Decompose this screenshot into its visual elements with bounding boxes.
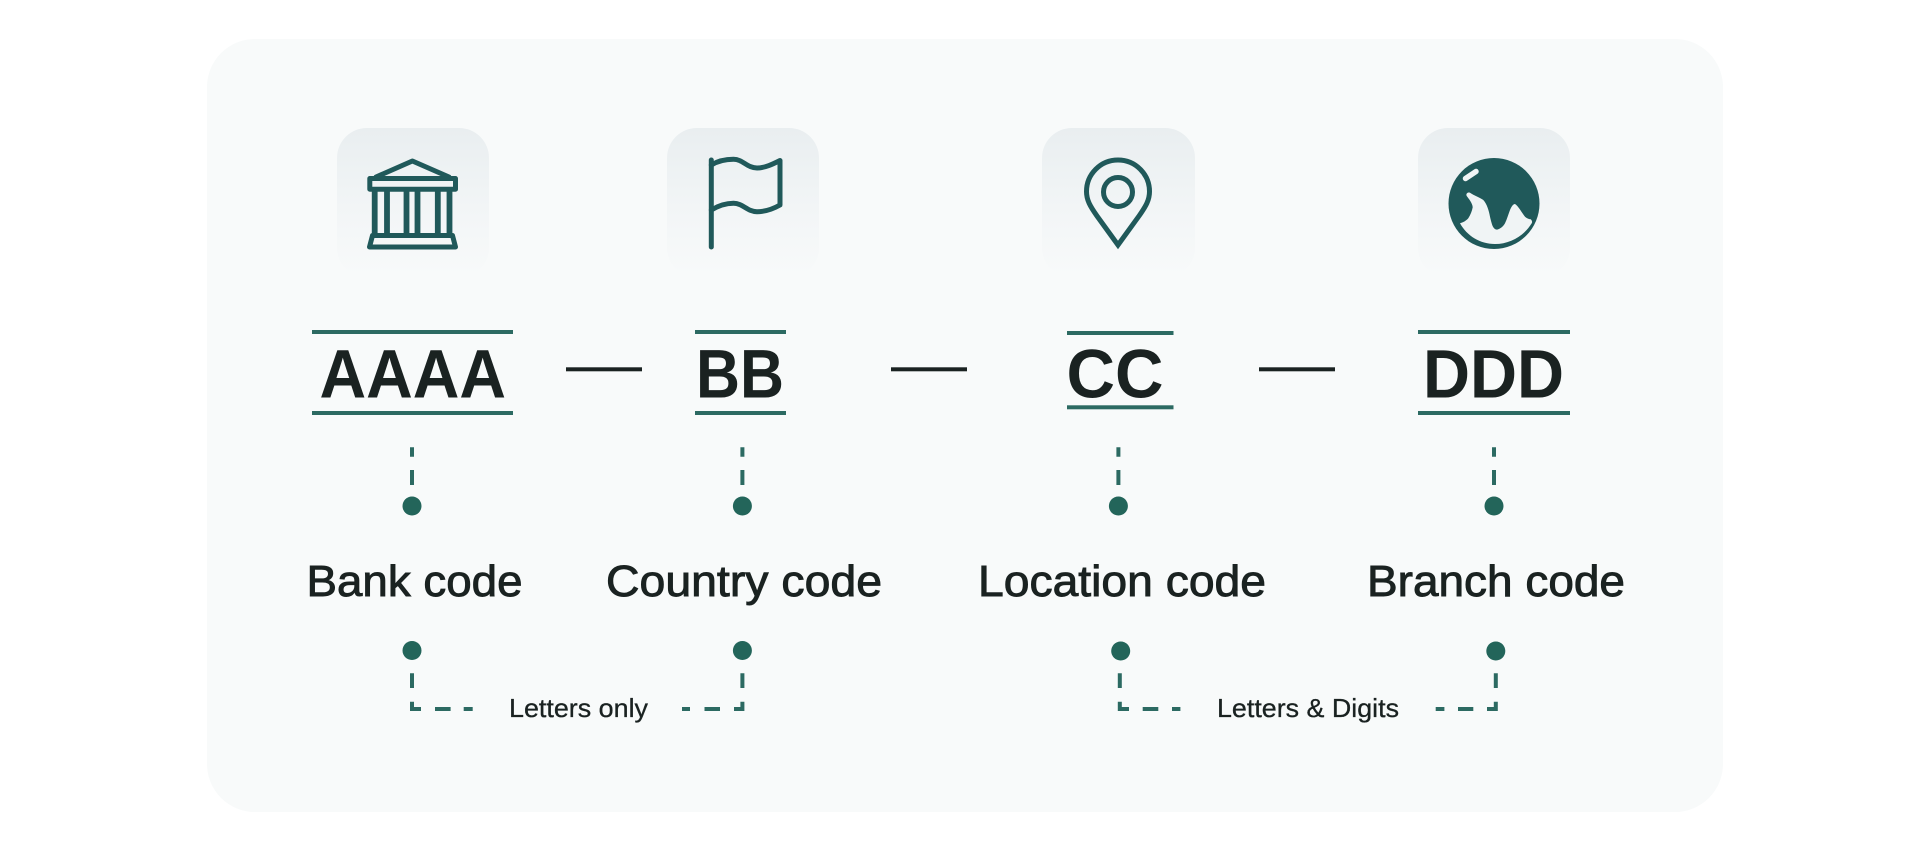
caption: Letters only: Letters only <box>509 693 648 723</box>
icon: location pin <box>1042 128 1195 278</box>
label: Country code: Country code <box>606 557 882 606</box>
label: Branch code: Branch code <box>1367 557 1625 606</box>
connector: CC to Location code <box>1109 447 1128 516</box>
connector: DDD to Branch code <box>1484 447 1504 516</box>
code group: AAAA: AAAA <box>320 336 506 412</box>
code group: CC: CC <box>1066 336 1164 412</box>
bracket: Letters only <box>402 641 752 723</box>
icon: flag <box>667 128 819 278</box>
code group: DDD: DDD <box>1423 336 1564 412</box>
connector: BB to Country code <box>733 447 752 516</box>
bracket: Letters and Digits <box>1111 642 1505 723</box>
code group: BB: BB <box>696 336 784 412</box>
caption: Letters & Digits: Letters & Digits <box>1217 693 1399 723</box>
separator dash 2 <box>891 367 967 371</box>
label: Bank code: Bank code <box>306 557 522 606</box>
separator dash 3 <box>1259 367 1335 371</box>
icon: bank building <box>337 128 489 278</box>
connector: AAAA to Bank code <box>402 447 422 516</box>
separator dash 1 <box>566 367 642 371</box>
icon: globe <box>1418 128 1570 278</box>
label: Location code: Location code <box>978 557 1266 606</box>
panel: bank code structure <box>207 39 1723 812</box>
